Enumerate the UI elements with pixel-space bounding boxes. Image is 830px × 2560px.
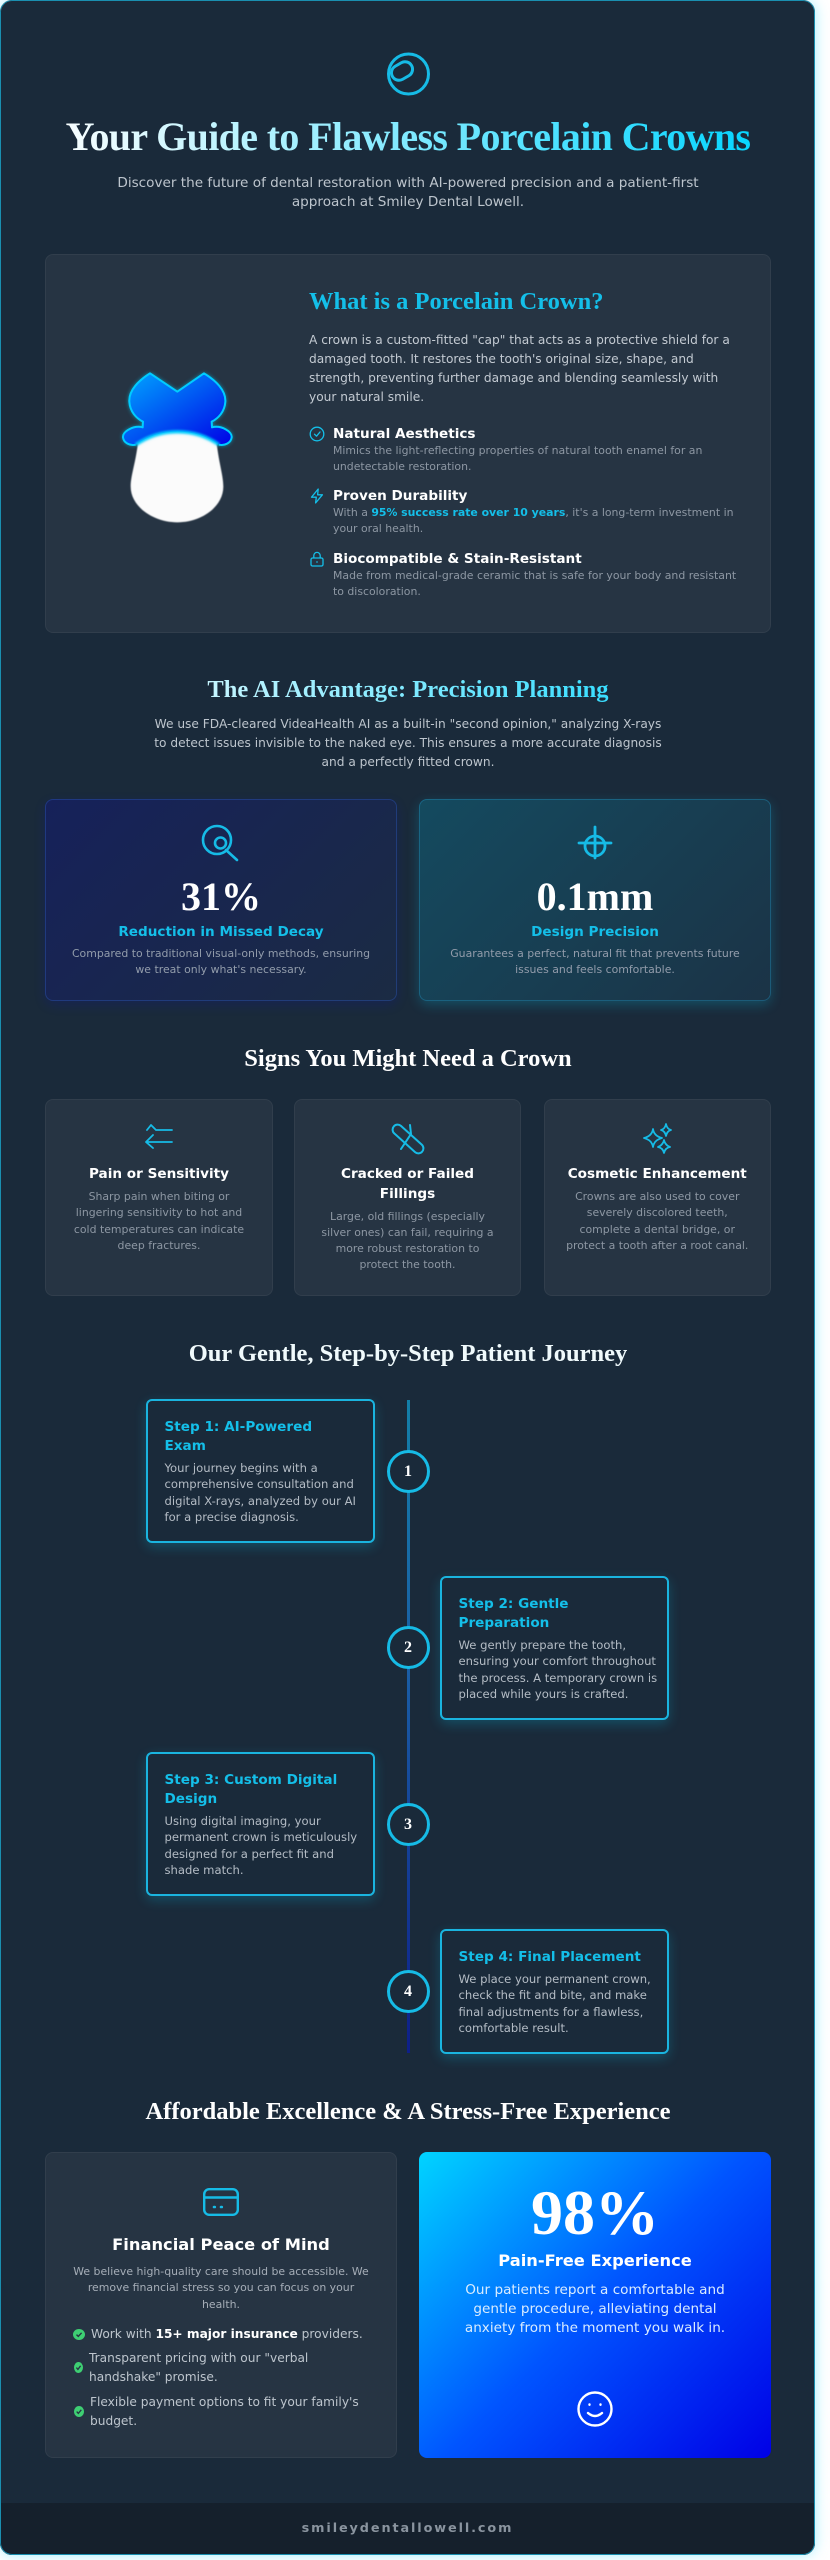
- item text: Work with 15+ major insurance providers.: [91, 2326, 363, 2340]
- card title: Cracked or Failed: [341, 1166, 474, 1182]
- step 1 marker: [386, 1450, 430, 1492]
- step title: Exam: [164, 1438, 206, 1454]
- stat description: Guarantees a perfect, natural fit that prevents future: [450, 947, 740, 960]
- step 4 card: [440, 1929, 669, 2054]
- panel: financial peace of mind: [45, 2152, 397, 2458]
- timeline line: [406, 1400, 410, 2053]
- step title: Step 3: Custom Digital: [164, 1772, 337, 1788]
- icon: green check: [73, 2329, 85, 2340]
- stat description: we treat only what's necessary.: [135, 963, 307, 976]
- big stat: 98%: [531, 2177, 659, 2248]
- card text: Sharp pain when biting or: [89, 1190, 229, 1203]
- intro paragraph: A crown is a custom-fitted "cap" that acts as a protective shield for a: [309, 332, 730, 346]
- card title: Fillings: [380, 1186, 435, 1202]
- step title: [458, 1596, 569, 1631]
- step 4 marker: [386, 1970, 430, 2012]
- intro paragraph: [309, 332, 730, 404]
- item text: [89, 2348, 308, 2386]
- step 4 marker: 4: [404, 1982, 412, 2000]
- intro paragraph: damaged tooth. It restores the tooth's original size, shape, and: [309, 352, 694, 366]
- stat label: Design Precision: [531, 924, 659, 940]
- item text: Transparent pricing with our "verbal: [89, 2350, 308, 2364]
- AI advantage paragraph: [154, 716, 662, 768]
- list item: payment: [73, 2392, 373, 2430]
- footer: smileydentallowell.com: [302, 2521, 513, 2536]
- step 2 marker: 2: [404, 1638, 412, 1656]
- step title: Design: [164, 1791, 217, 1807]
- step 3 marker: [386, 1802, 430, 1846]
- step text: the process. A temporary crown is: [458, 1671, 657, 1685]
- step title: Preparation: [458, 1615, 549, 1631]
- heading: signs: Signs You Might Need a Crown: [244, 1045, 572, 1072]
- card text: more robust restoration to: [336, 1242, 479, 1255]
- icon: lightning bolt: [310, 488, 324, 504]
- benefit title: Biocompatible & Stain-Resistant: [333, 550, 582, 566]
- step 2 card: [440, 1576, 669, 1720]
- step text: [458, 1638, 657, 1701]
- step text: comfortable result.: [458, 2021, 569, 2035]
- step text: digital X-rays, analyzed by our AI: [164, 1494, 356, 1508]
- card text: Our patients report a comfortable and: [465, 2282, 725, 2298]
- panel: pain-free experience: [419, 2152, 771, 2458]
- step text: final adjustments for a flawless,: [458, 2005, 643, 2019]
- card text: protect the tooth.: [359, 1258, 456, 1271]
- stat value: 0.1mm: [537, 874, 653, 919]
- heading: What is a Porcelain Crown?: [309, 288, 603, 314]
- card text: Large, old fillings (especially: [330, 1210, 485, 1222]
- icon: tooth logo ring: [387, 52, 430, 96]
- card text: remove financial stress so you can focus on your: [88, 2281, 354, 2294]
- intro paragraph: your natural smile.: [309, 390, 424, 404]
- step text: for a precise diagnosis.: [164, 1510, 299, 1524]
- card text: health.: [202, 2298, 240, 2311]
- step title: [164, 1772, 337, 1807]
- AI advantage paragraph: to detect issues invisible to the naked eye. This ensures a more accurate diagnosis: [154, 736, 662, 750]
- benefit text: undetectable restoration.: [333, 460, 471, 473]
- card text: protect a tooth after a root canal.: [566, 1239, 748, 1252]
- step text: [458, 1972, 651, 2035]
- benefit: natural aesthetics: [310, 426, 702, 473]
- card text: We believe high-quality care should be accessible. We: [73, 2265, 369, 2278]
- icon: magnifier: [202, 824, 238, 862]
- benefit text: to discoloration.: [333, 585, 421, 598]
- item text: [90, 2392, 359, 2430]
- card text: [321, 1210, 494, 1271]
- benefit text: Made from medical-grade ceramic that is safe for your body and resistant: [333, 568, 736, 582]
- icon: pill and tool: [392, 1124, 424, 1154]
- heading: affordable excellence: Affordable Excellence & A Stress-Free Experience: [145, 2098, 671, 2125]
- card text: cold temperatures can indicate: [74, 1223, 244, 1236]
- icon: arrows: [145, 1124, 173, 1149]
- icon: lock: [310, 552, 324, 567]
- item text: handshake" promise.: [89, 2370, 218, 2384]
- sign card: pain: [45, 1099, 273, 1296]
- step 2 marker: [386, 1626, 430, 1668]
- benefit text: [333, 444, 702, 473]
- icon: sparkles: [643, 1123, 672, 1154]
- card text: severely discolored teeth,: [587, 1206, 728, 1219]
- icon: credit card: [203, 2188, 239, 2216]
- step text: permanent crown is meticulously: [164, 1830, 357, 1844]
- list item: insurance: [73, 2326, 363, 2340]
- icon: green check: [74, 2406, 84, 2416]
- card title: Pain or Sensitivity: [89, 1166, 229, 1182]
- benefit: biocompatible: [310, 550, 736, 598]
- step text: placed while yours is crafted.: [458, 1687, 628, 1701]
- step text: Your journey begins with a: [164, 1461, 318, 1475]
- card title: Pain-Free Experience: [498, 2251, 692, 2270]
- card text: complete a dental bridge, or: [580, 1223, 735, 1236]
- benefit text: Mimics the light-reflecting properties of natural tooth enamel for an: [333, 444, 702, 456]
- step 1 card: [146, 1399, 375, 1543]
- footer: [0, 2503, 815, 2555]
- card text: [73, 2265, 369, 2311]
- step text: shade match.: [164, 1863, 244, 1877]
- card title: [341, 1166, 474, 1202]
- sign card: cosmetic: [544, 1099, 771, 1296]
- item text: Flexible payment options to fit your family's: [90, 2394, 359, 2408]
- card text: [419, 2280, 771, 2338]
- card text: lingering sensitivity to hot and: [76, 1206, 242, 1219]
- step 1 marker: 1: [404, 1462, 412, 1480]
- step text: ensuring your comfort throughout: [458, 1654, 656, 1668]
- benefit title: Natural Aesthetics: [333, 426, 476, 442]
- benefit text: your oral health.: [333, 522, 423, 535]
- timeline: [141, 1398, 674, 2063]
- subtitle: [117, 174, 699, 210]
- card text: anxiety from the moment you walk in.: [465, 2320, 725, 2336]
- heading: the AI advantage: The AI Advantage: Precision Planning: [207, 676, 609, 703]
- subtitle: approach at Smiley Dental Lowell.: [292, 194, 524, 210]
- step 3 marker: 3: [404, 1816, 412, 1832]
- step title: Step 4: Final Placement: [458, 1948, 641, 1964]
- step text: We place your permanent crown,: [458, 1972, 651, 1986]
- AI advantage paragraph: We use FDA-cleared VideaHealth AI as a built-in "second opinion," analyzing X-rays: [155, 716, 661, 730]
- benefit text: [333, 568, 736, 598]
- sign card: cracked fillings: [294, 1099, 521, 1296]
- stat description: Compared to traditional visual-only methods, ensuring: [72, 947, 370, 960]
- step 3 card: [146, 1752, 375, 1896]
- icon: check circle: [310, 426, 324, 442]
- step text: check the fit and bite, and make: [458, 1988, 647, 2002]
- step text: Using digital imaging, your: [164, 1814, 321, 1828]
- step title: Step 2: Gentle: [458, 1596, 569, 1612]
- step text: We gently prepare the tooth,: [458, 1638, 626, 1652]
- stat value: 31%: [181, 874, 261, 919]
- card text: silver ones) can fail, requiring a: [321, 1226, 494, 1239]
- card title: Financial Peace of Mind: [112, 2235, 330, 2254]
- stat description: [72, 947, 370, 976]
- stat card: 31%: [45, 799, 397, 1001]
- card text: deep fractures.: [118, 1239, 200, 1252]
- step title: [164, 1418, 312, 1454]
- stat description: [450, 947, 740, 976]
- stat card: 0.1mm: [419, 799, 771, 1001]
- benefit: proven durability: [310, 488, 734, 535]
- title: Your Guide to Flawless Porcelain Crowns: [66, 114, 750, 158]
- icon: smiley: [575, 2389, 615, 2429]
- benefit title: Proven Durability: [333, 488, 467, 504]
- step text: [164, 1461, 356, 1524]
- card text: [566, 1190, 748, 1252]
- AI advantage paragraph: and a perfectly fitted crown.: [322, 754, 494, 768]
- intro paragraph: strength, preventing further damage and blending seamlessly with: [309, 370, 718, 384]
- subtitle: Discover the future of dental restoration with AI-powered precision and a patient-first: [117, 174, 699, 190]
- step text: [164, 1814, 357, 1877]
- list item: pricing: [73, 2348, 373, 2386]
- icon: crosshair: [578, 826, 612, 860]
- panel: what is a porcelain crown: [45, 254, 771, 633]
- heading: patient journey: Our Gentle, Step-by-Step Patient Journey: [189, 1340, 627, 1367]
- illustration: crown over tooth: [120, 371, 235, 524]
- item text: budget.: [90, 2414, 137, 2428]
- benefit text: [333, 506, 734, 535]
- card text: Crowns are also used to cover: [575, 1190, 739, 1203]
- icon: green check: [74, 2362, 83, 2372]
- step title: Step 1: AI-Powered: [164, 1418, 312, 1434]
- step text: designed for a perfect fit and: [164, 1847, 334, 1861]
- stat label: Reduction in Missed Decay: [118, 924, 324, 940]
- benefit text: With a 95% success rate over 10 years, it's a long-term investment in: [333, 506, 734, 519]
- card title: Cosmetic Enhancement: [568, 1166, 747, 1182]
- card text: gentle procedure, alleviating dental: [473, 2300, 717, 2316]
- card text: [74, 1190, 244, 1252]
- stat description: issues and feels comfortable.: [515, 963, 675, 976]
- step text: comprehensive consultation and: [164, 1477, 354, 1491]
